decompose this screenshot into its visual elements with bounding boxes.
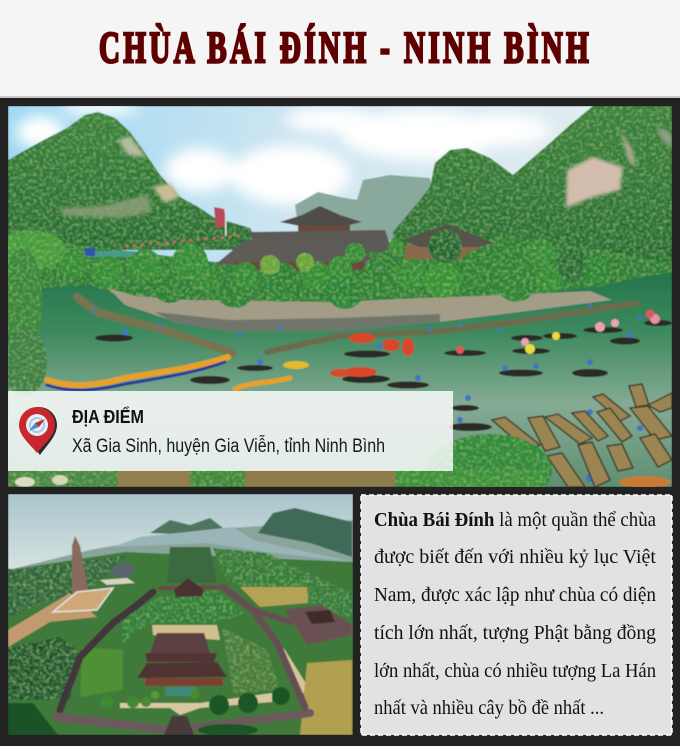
description text: Nam, được xác lập như chùa có diện	[374, 584, 656, 606]
orange construction land	[8, 593, 97, 647]
location overlay card	[8, 391, 453, 471]
terrain base	[8, 552, 353, 735]
flags and kiosks row	[82, 250, 136, 258]
right garden	[222, 627, 280, 693]
grass lawn	[80, 647, 123, 697]
header band	[0, 0, 680, 98]
docked boats and flowers along bottom edge	[14, 471, 672, 487]
right mountains	[393, 106, 672, 265]
main photo: Bai Dinh lake and temple	[0, 101, 672, 506]
central garden	[122, 590, 247, 643]
icon: map pin compass	[19, 407, 57, 455]
boat dock line	[77, 297, 637, 353]
title: CHÙA BÁI ĐÍNH - NINH BÌNH	[99, 23, 589, 73]
trees	[57, 229, 613, 309]
temple halls	[214, 204, 494, 270]
front courtyard and paths	[120, 693, 272, 715]
location heading: ĐỊA ĐIỂM	[72, 406, 144, 427]
pagoda tower	[72, 536, 90, 600]
side hall right	[285, 605, 352, 645]
description text: lớn nhất, chùa có nhiều tượng La Hán	[374, 660, 656, 682]
moored boats lower right	[492, 384, 672, 487]
hazy far mountain	[295, 175, 440, 240]
main hall	[137, 633, 227, 696]
description text: Chùa Bái Đính là một quần thể chùa	[374, 509, 656, 531]
location address: Xã Gia Sinh, huyện Gia Viễn, tỉnh Ninh Bình	[72, 435, 385, 457]
dark woods	[8, 637, 77, 700]
description panel	[361, 495, 672, 735]
left wooded hill	[8, 556, 125, 617]
shore land with steps	[108, 288, 612, 323]
foreground shrubs	[8, 434, 552, 487]
gate	[164, 716, 194, 735]
trees	[101, 687, 290, 736]
museum building	[107, 562, 137, 578]
lake water	[8, 268, 672, 487]
back complex	[167, 547, 217, 583]
rowing boats	[93, 303, 672, 482]
perimeter walls	[57, 587, 310, 730]
courtyard behind main hall	[152, 625, 220, 640]
rear hall	[174, 578, 204, 597]
description text: tích lớn nhất, tượng Phật bằng đồng	[374, 622, 656, 644]
orchard	[240, 587, 308, 607]
hazy sky	[8, 494, 353, 569]
description text: được biết đến với nhiều kỷ lục Việt	[374, 546, 656, 568]
left mountain	[8, 112, 262, 250]
tree line backdrop	[38, 239, 672, 302]
aerial photo of the pagoda complex	[8, 494, 353, 736]
right field	[300, 660, 352, 735]
green right	[213, 548, 352, 620]
sky and clouds	[8, 106, 594, 263]
left foreground tree	[8, 230, 66, 396]
hills and lake	[9, 508, 353, 570]
description text: nhất và nhiều cây bồ đề nhất ...	[374, 697, 604, 719]
pagoda platform	[53, 588, 113, 612]
description text	[374, 509, 656, 719]
festival banners	[47, 357, 290, 390]
